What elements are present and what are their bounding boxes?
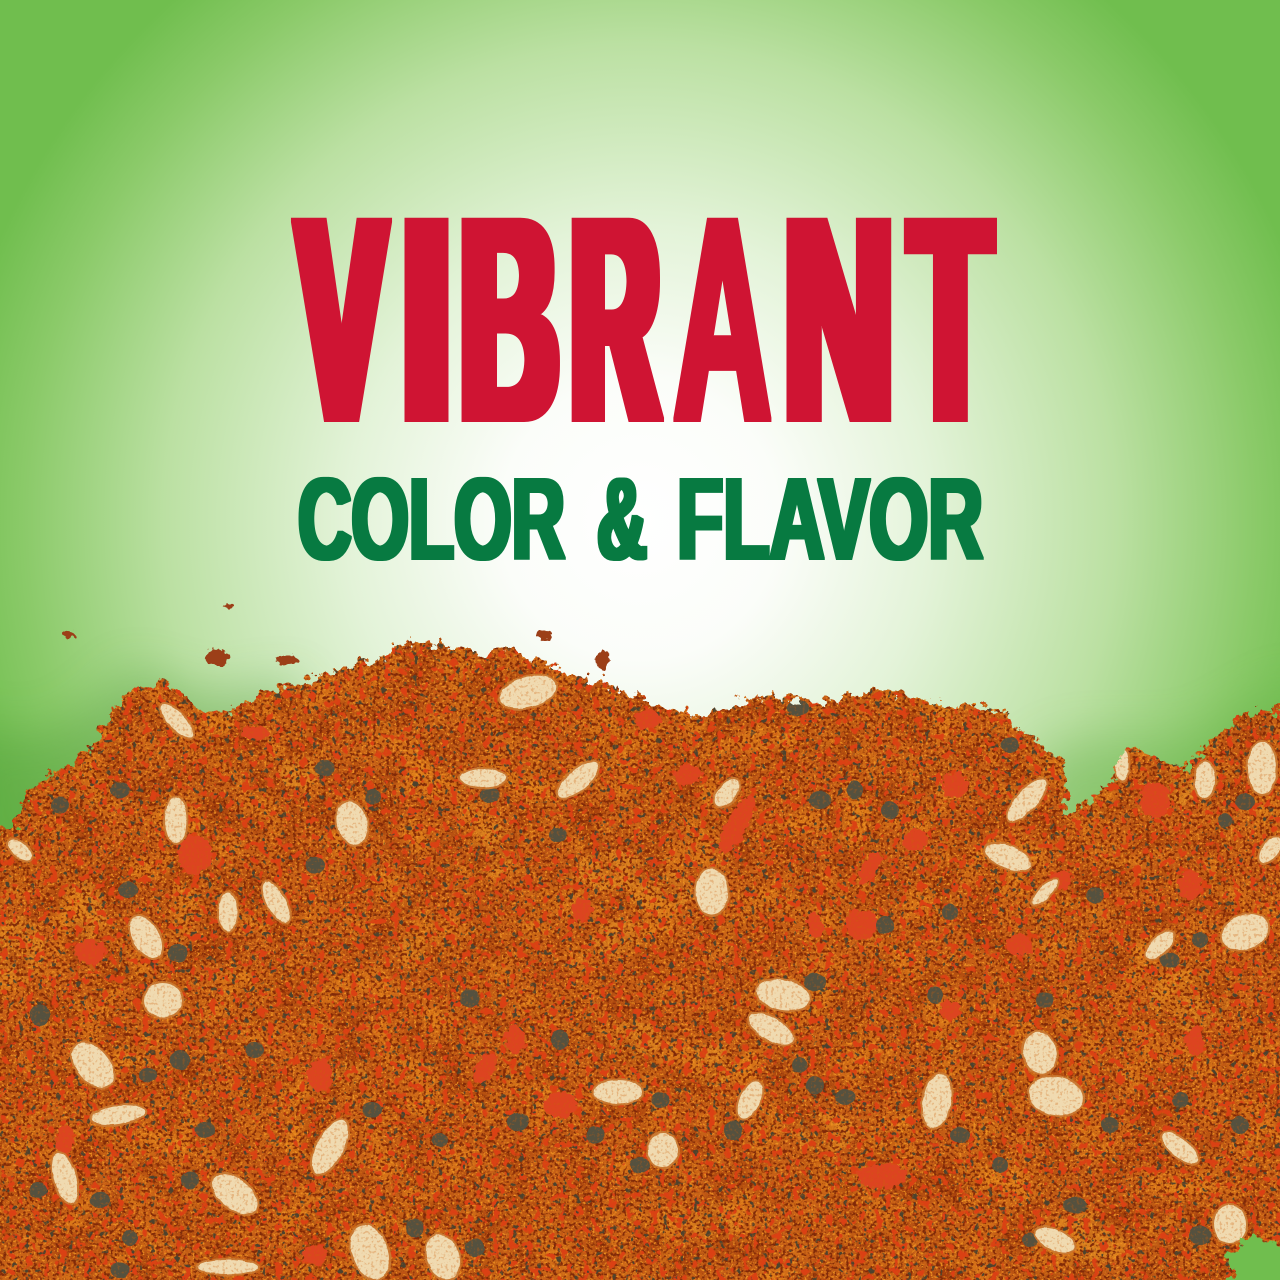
subtitle: COLOR & FLAVOR: FLAVOR [677,454,983,584]
title: VIBRANT: I [400,157,454,482]
dark poppy seeds [29,700,1255,1278]
pile poppy specks [0,630,1280,1280]
title: VIBRANT: B [460,157,558,482]
pile light patches [0,630,1280,1280]
pile shadow [0,670,300,900]
pile dark grains [0,630,1280,1280]
title: VIBRANT: N [784,157,893,482]
title: VIBRANT: R [572,157,659,482]
pile shadow right [1030,680,1280,900]
pile darker patches [0,630,1280,1280]
title: VIBRANT [298,157,990,482]
title: VIBRANT: A [674,157,771,482]
subtitle: COLOR & FLAVOR: & [597,454,647,584]
flying spice crumbs [64,603,611,669]
spice pile [0,630,1280,1280]
pile light grains [0,630,1280,1280]
subtitle: COLOR & FLAVOR: COLOR [298,454,565,584]
subtitle: COLOR & FLAVOR [298,454,983,584]
red flakes [56,710,1204,1265]
title: VIBRANT: V [298,157,386,482]
pile red grains [0,630,1280,1280]
top grain overlay [0,630,1280,1280]
text: T [910,157,990,482]
orange chunks [0,756,1230,1266]
pile base colour [0,630,1280,1280]
sesame seeds [3,669,1280,1280]
